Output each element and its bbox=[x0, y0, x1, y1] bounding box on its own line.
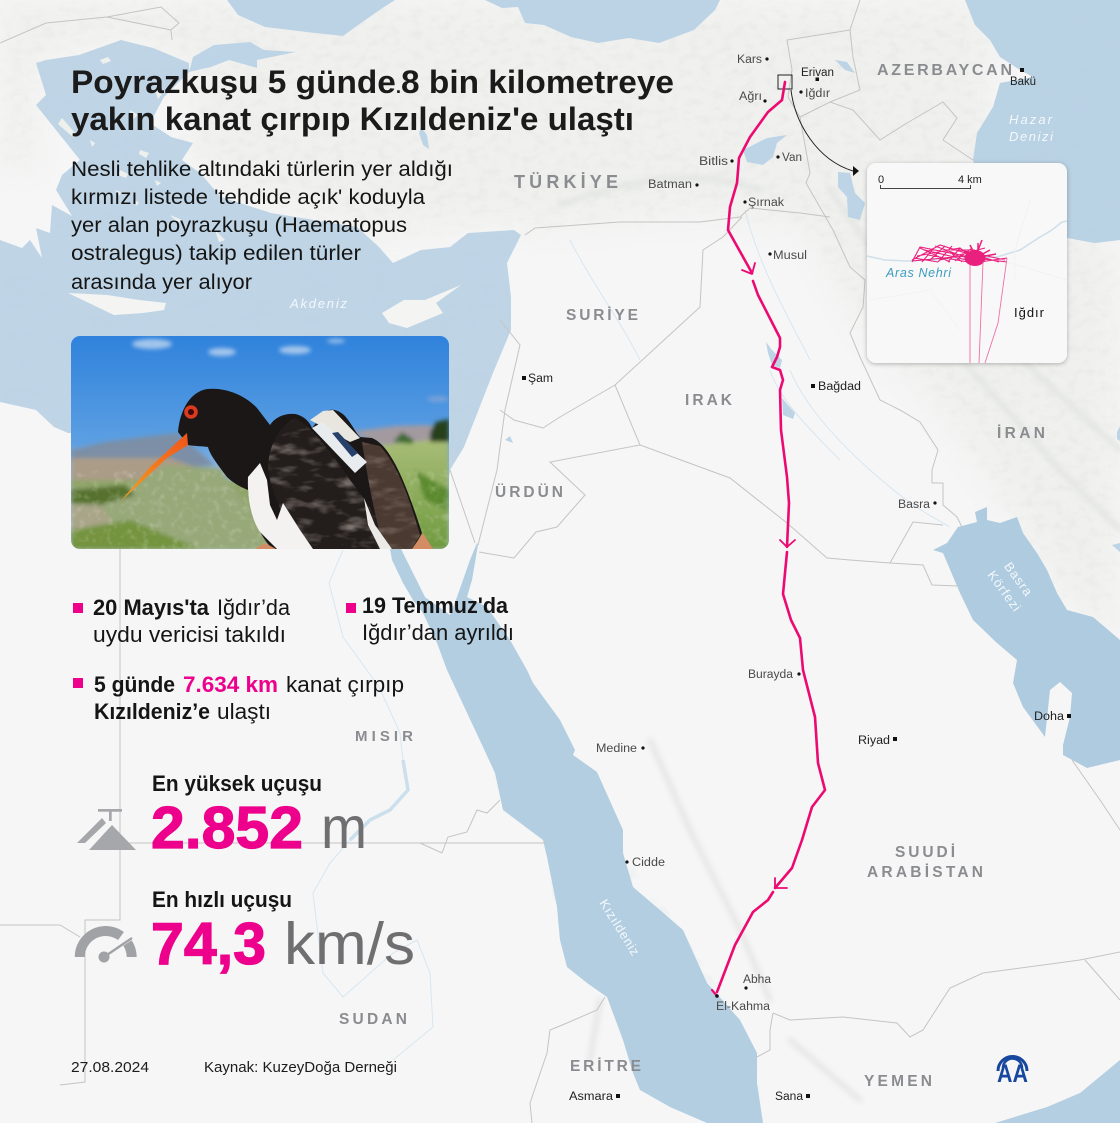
city and region labels: ERİTRE bbox=[570, 1058, 641, 1075]
title: Poyrazkuşu 5 günde .8 bin kilometreye bbox=[71, 64, 674, 100]
date: 27.08.2024 bbox=[71, 1059, 149, 1076]
lakes bbox=[419, 60, 1120, 552]
city and region labels: Cidde bbox=[632, 857, 665, 869]
city and region labels: Musul bbox=[773, 250, 807, 262]
connector arrow to inset bbox=[791, 90, 859, 176]
fact: tag date: Iğdır’da bbox=[217, 595, 291, 620]
rivers bbox=[313, 210, 950, 1060]
city and region labels: SUDAN bbox=[339, 1011, 407, 1028]
faint roads and terrain bbox=[1014, 250, 1016, 252]
inset locator box on map bbox=[778, 75, 792, 89]
fact: tag date bbox=[73, 595, 291, 647]
migration route bbox=[712, 82, 825, 996]
label: Iğdır: Iğdır bbox=[1014, 305, 1045, 320]
bullet facts bbox=[73, 593, 514, 724]
sea: Gulf of Aden bbox=[995, 1060, 1120, 1123]
fact: distance: Kızıldeniz’e bbox=[94, 699, 210, 724]
city and region labels: Bağdad bbox=[818, 381, 861, 393]
terrain shading bbox=[6, 3, 1114, 610]
foliage texture bbox=[71, 470, 449, 550]
city and region labels: Basra bbox=[1001, 559, 1036, 600]
scale bar: 4 km bbox=[958, 174, 982, 186]
fact: departure date: Iğdır’dan ayrıldı bbox=[362, 620, 514, 645]
city and region labels: ÜRDÜN bbox=[495, 484, 563, 501]
label: Aras river: Aras Nehri bbox=[885, 266, 952, 280]
inset map panel bbox=[867, 163, 1067, 363]
city and region labels: El-Kahma bbox=[716, 1001, 771, 1013]
city and region labels: Riyad bbox=[858, 735, 890, 747]
stat: fastest flight: km/s bbox=[284, 911, 415, 977]
roost cluster bbox=[964, 250, 986, 266]
bird body bbox=[178, 389, 422, 549]
fact: departure date: 19 Temmuz'da bbox=[362, 593, 509, 618]
title: yakın kanat çırpıp Kızıldeniz'e ulaştı bbox=[71, 101, 634, 137]
intro paragraph: ostralegus) takip edilen türler bbox=[71, 241, 361, 265]
fact: tag date: uydu vericisi takıldı bbox=[93, 622, 286, 647]
city and region labels: Doha bbox=[1034, 711, 1065, 723]
Aegean islands bbox=[58, 57, 225, 242]
outbound track lines bbox=[970, 258, 1007, 363]
wing feathers bbox=[268, 418, 378, 549]
scale bar: 0 bbox=[878, 174, 884, 186]
city and region labels: Bakü bbox=[1010, 76, 1036, 88]
hand bbox=[255, 533, 433, 549]
city and region labels: Sana bbox=[775, 1091, 804, 1103]
city and region labels: TÜRKİYE bbox=[514, 172, 618, 192]
city and region labels: Şam bbox=[528, 373, 553, 385]
city and region labels: Iğdır bbox=[805, 88, 830, 100]
fact: tag date: 20 Mayıs'ta bbox=[93, 595, 210, 620]
intro paragraph bbox=[71, 157, 453, 294]
fact: distance: 5 günde bbox=[94, 672, 175, 697]
city and region labels: Şırnak bbox=[748, 197, 784, 209]
mountain ridges bbox=[560, 178, 1120, 1100]
city and region labels: Burayda bbox=[748, 669, 794, 681]
sea: Black Sea bbox=[227, 0, 720, 43]
fact: distance: 7.634 km bbox=[183, 672, 278, 697]
satellite tag bbox=[310, 410, 360, 442]
stat: highest flight: En yüksek uçuşu bbox=[152, 771, 322, 796]
city and region labels: Medine bbox=[596, 743, 637, 755]
city and region labels: Kars bbox=[737, 54, 762, 66]
beak bbox=[120, 433, 188, 502]
eye bbox=[184, 405, 198, 419]
stat: fastest flight: En hızlı uçuşu bbox=[152, 887, 292, 912]
icon: mountain peak bbox=[77, 809, 136, 850]
city and region labels: MISIR bbox=[355, 728, 413, 745]
city and region labels: Asmara bbox=[569, 1091, 614, 1103]
fact: departure date bbox=[346, 593, 514, 645]
city and region labels: Hazar bbox=[1009, 112, 1053, 127]
sea: Caspian bbox=[965, 0, 1120, 243]
sea: Marmara bbox=[189, 42, 296, 72]
bird track lines bbox=[912, 240, 1007, 262]
city and region labels: AZERBAYCAN bbox=[877, 62, 1012, 79]
city and region labels: Körfezi bbox=[985, 568, 1025, 615]
city and region labels: SUUDİ bbox=[895, 844, 955, 861]
photo background landscape bbox=[71, 339, 449, 550]
intro paragraph: arasında yer alıyor bbox=[71, 270, 252, 294]
sea: Persian Gulf bbox=[933, 507, 1120, 768]
city and region labels: Basra bbox=[898, 499, 931, 511]
city and region labels: Erivan bbox=[801, 67, 834, 79]
sea: Red Sea with Gulf of Suez and Aqaba bbox=[390, 543, 763, 1123]
stat: fastest flight: 74,3 bbox=[151, 911, 266, 977]
city and region labels: ARABİSTAN bbox=[867, 864, 983, 881]
stat: highest flight: 2.852 bbox=[151, 795, 303, 861]
city and region labels: Abha bbox=[743, 974, 772, 986]
city and region labels: Akdeniz bbox=[289, 296, 348, 311]
stat: highest flight bbox=[77, 771, 367, 861]
title bbox=[71, 64, 674, 137]
city and region labels: Bitlis bbox=[699, 156, 728, 168]
city and region labels: Kızıldeniz bbox=[596, 896, 643, 959]
city and region labels: Batman bbox=[648, 179, 692, 191]
white belly bbox=[248, 463, 313, 549]
icon: speedometer bbox=[80, 931, 132, 962]
city and region labels: SURİYE bbox=[566, 307, 638, 324]
logo: Anadolu Agency: AA bbox=[997, 1060, 1028, 1088]
source: Kaynak: KuzeyDoğa Derneği bbox=[204, 1059, 397, 1076]
fact: distance: ulaştı bbox=[217, 699, 271, 724]
city and region labels: YEMEN bbox=[864, 1073, 932, 1090]
stat: highest flight: m bbox=[321, 795, 367, 861]
Aras river bbox=[867, 221, 1067, 261]
scale bar bbox=[878, 174, 982, 188]
city and region labels: IRAK bbox=[685, 392, 733, 409]
intro paragraph: kırmızı listede 'tehdide açık' koduyla bbox=[71, 185, 425, 209]
fact: distance: kanat çırpıp bbox=[286, 672, 404, 697]
sea: Mediterranean and Aegean bbox=[0, 40, 521, 478]
city and region labels: İRAN bbox=[997, 425, 1045, 442]
intro paragraph: yer alan poyrazkuşu (Haematopus bbox=[71, 213, 407, 237]
island: Crete bbox=[68, 293, 166, 315]
stat: fastest flight bbox=[80, 887, 415, 977]
city and region labels: Van bbox=[782, 152, 802, 164]
fact: distance bbox=[73, 672, 404, 724]
photo: tagged oystercatcher bbox=[71, 336, 449, 550]
city and region labels: Denizi bbox=[1009, 129, 1054, 144]
city and region labels: Ağrı bbox=[739, 91, 762, 103]
island: Cyprus bbox=[382, 285, 461, 328]
intro paragraph: Nesli tehlike altındaki türlerin yer aldığı bbox=[71, 157, 453, 181]
city and region labels bbox=[289, 54, 1071, 1103]
